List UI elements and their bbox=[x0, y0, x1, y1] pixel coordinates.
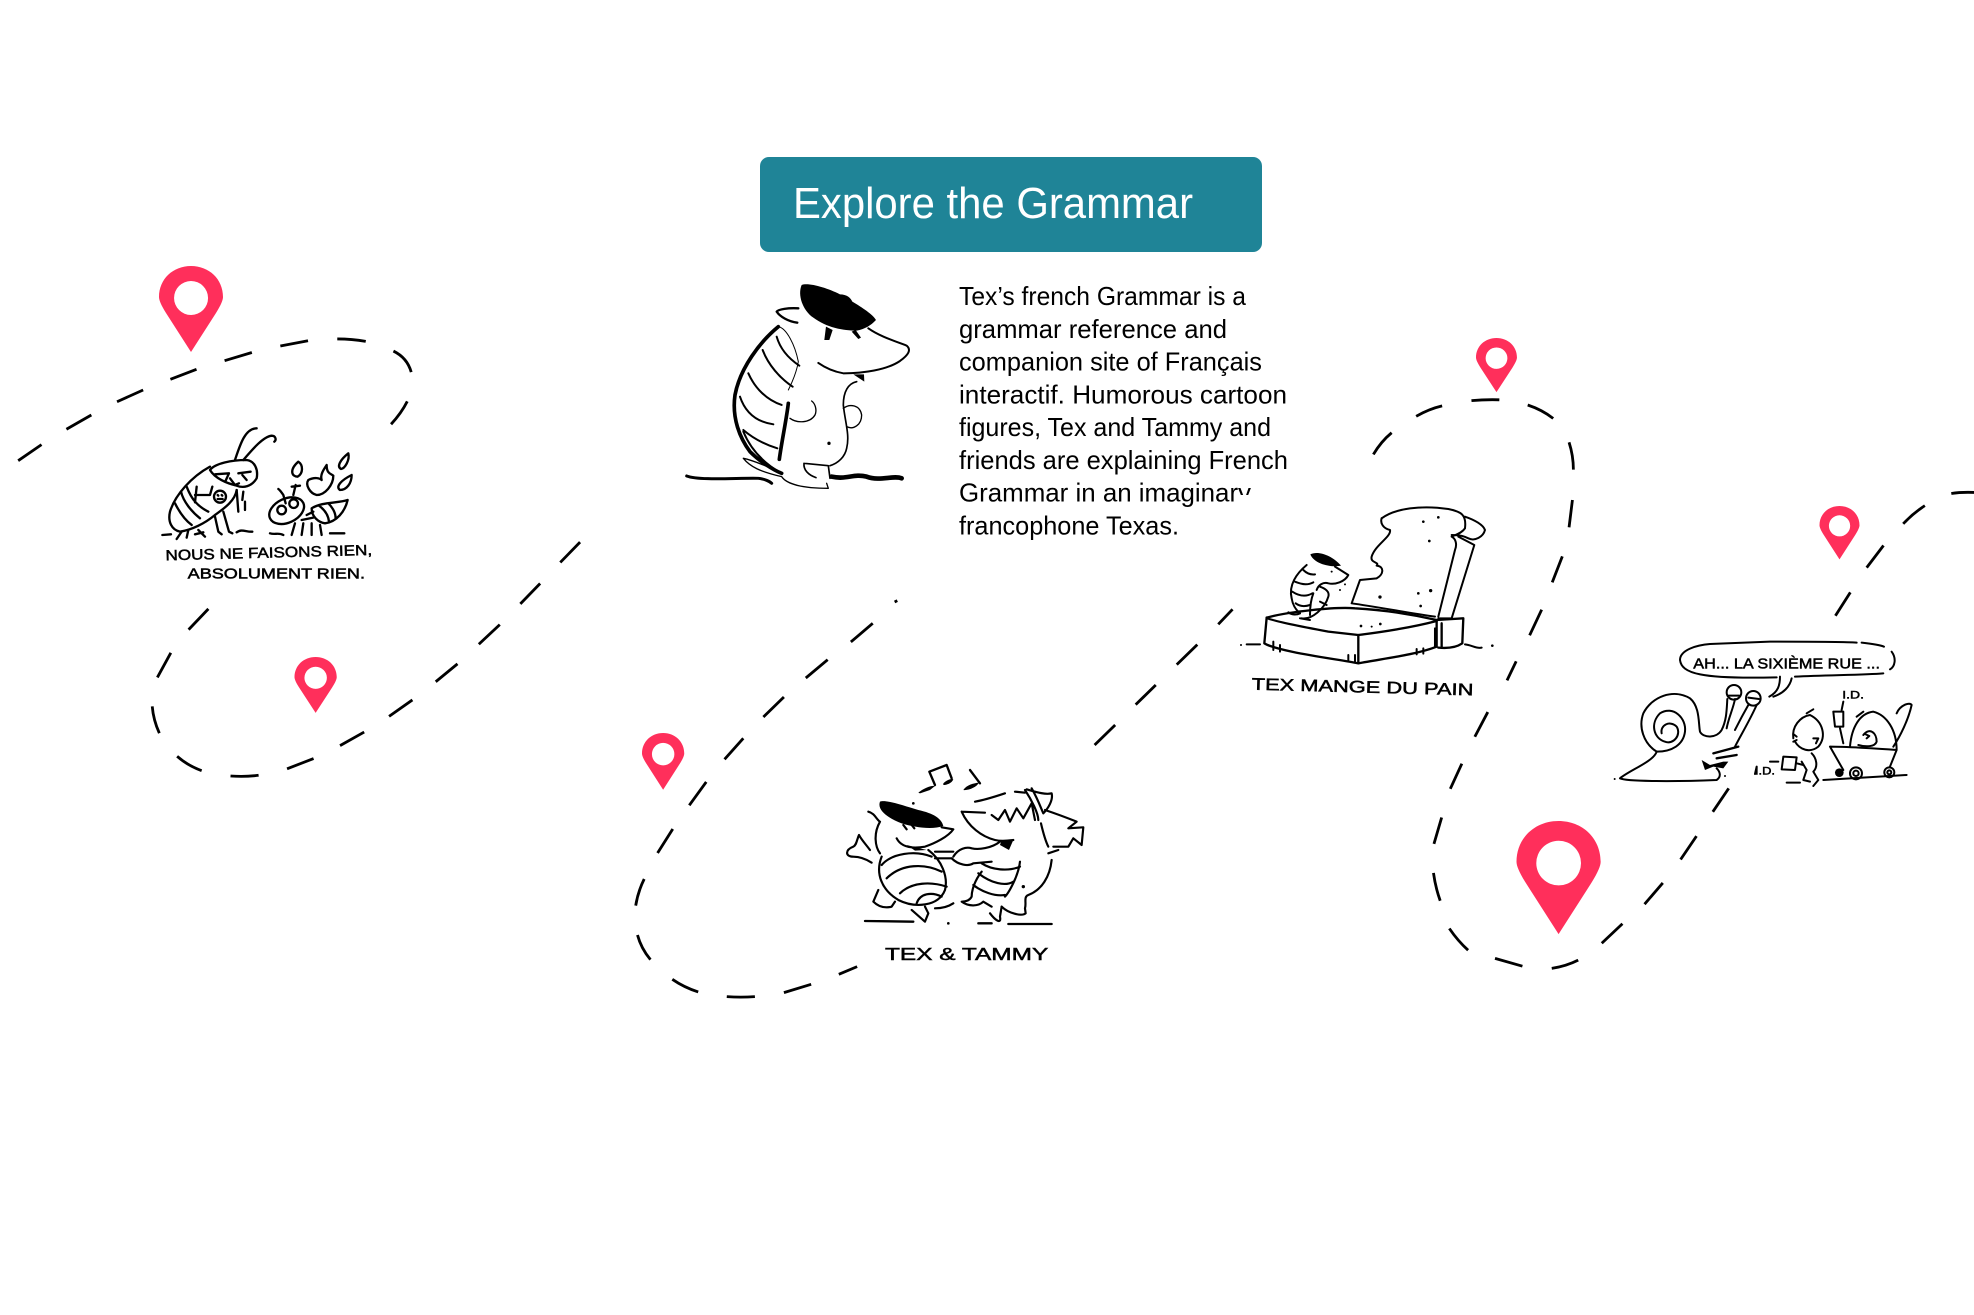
dancing caption: TEX & TAMMY bbox=[885, 944, 1048, 964]
map pin 2 bbox=[294, 657, 337, 713]
intro text block: Tex’s french Grammar is a bbox=[959, 281, 1247, 311]
speech bubble: AH... LA SIXIÈME RUE ... bbox=[1693, 656, 1880, 673]
snail side labels bbox=[1755, 689, 1864, 777]
intro text block: interactif. Humorous cartoon bbox=[959, 379, 1287, 409]
cartoon: snail and children bbox=[1614, 642, 1912, 786]
cartoon: Tex the armadillo bbox=[687, 284, 909, 488]
snail side labels: I.D. bbox=[1842, 689, 1864, 701]
snail bbox=[1620, 685, 1761, 781]
cartoon: insects with caption bbox=[162, 428, 372, 583]
intro text block: francophone Texas. bbox=[959, 510, 1179, 540]
snail side labels: I.D. bbox=[1755, 765, 1775, 777]
cartoon: Tex and Tammy dancing bbox=[847, 765, 1083, 964]
insects caption bbox=[165, 543, 372, 583]
bread caption: TEX MANGE DU PAIN bbox=[1252, 675, 1474, 699]
speech bubble bbox=[1680, 642, 1895, 697]
insects caption: ABSOLUMENT RIEN. bbox=[188, 567, 365, 583]
title banner: Explore the Grammar bbox=[793, 179, 1193, 228]
intro text block bbox=[959, 281, 1288, 540]
map pin 3 bbox=[642, 733, 684, 790]
intro text block: friends are explaining French bbox=[959, 445, 1288, 475]
dashed route: left loop bbox=[18, 339, 580, 776]
title banner bbox=[760, 157, 1262, 252]
intro text block: grammar reference and bbox=[959, 314, 1227, 344]
map pin 4 bbox=[1476, 338, 1517, 392]
cartoon: Tex eating bread bbox=[1240, 507, 1494, 699]
toddler and pram bbox=[1755, 702, 1912, 786]
intro text block: figures, Tex and Tammy and bbox=[959, 412, 1271, 442]
dashed route: centre loop bbox=[636, 601, 1233, 997]
map pin 5 bbox=[1820, 506, 1860, 559]
insects caption: NOUS NE FAISONS RIEN, bbox=[165, 543, 372, 564]
map pin 6 bbox=[1516, 821, 1601, 934]
intro text block: Grammar in an imaginary bbox=[959, 478, 1251, 508]
intro text block: companion site of Français bbox=[959, 347, 1262, 377]
map pin 1 bbox=[159, 266, 223, 352]
dashed route: right loop bbox=[1373, 400, 1974, 968]
